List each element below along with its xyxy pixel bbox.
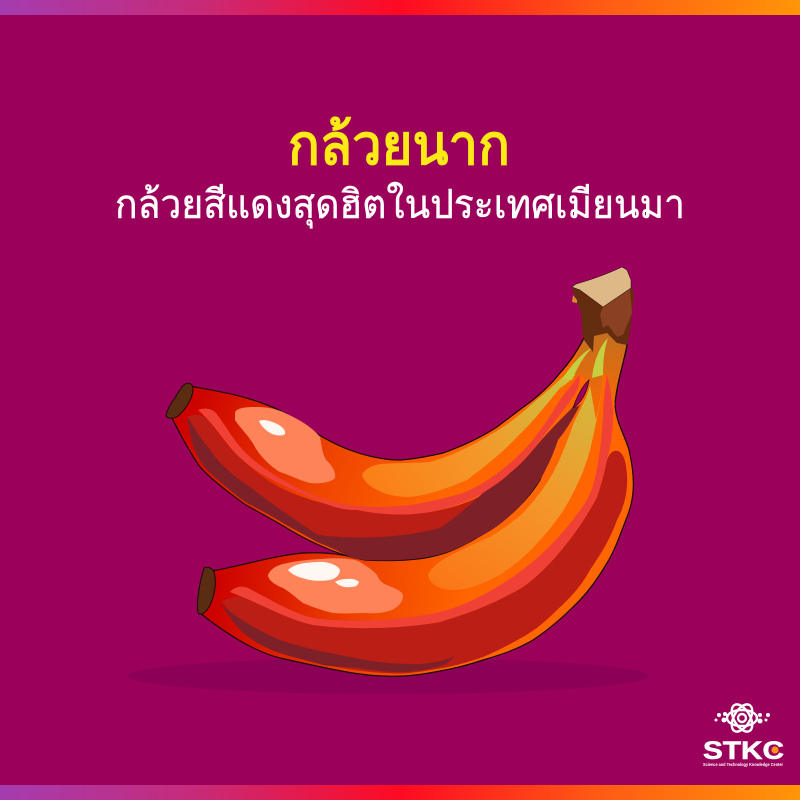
stem outline — [560, 338, 627, 403]
crown brown base — [572, 286, 634, 352]
stem light red tips — [565, 375, 613, 412]
upper banana white glint — [259, 420, 285, 436]
ground shadow — [127, 658, 649, 694]
logo tagline: Science and Technology Knowledge Center — [703, 762, 783, 767]
lower banana yellow stripe — [428, 338, 608, 590]
logo atom icon — [727, 701, 757, 735]
lower banana dark red band — [222, 451, 627, 674]
top gradient bar — [0, 0, 800, 15]
logo orange dot — [771, 746, 779, 754]
upper banana tip — [166, 383, 193, 418]
logo: STKC — [703, 701, 784, 767]
banana stem — [560, 328, 628, 420]
logo dots — [714, 712, 770, 724]
lower banana highlight — [268, 558, 403, 613]
crown small flake — [572, 295, 577, 303]
upper banana maroon shading — [188, 403, 581, 560]
crown tan cut — [572, 267, 631, 307]
title: กล้วยนาก — [288, 113, 510, 176]
stem green ridges — [563, 338, 608, 380]
lower banana tip — [197, 567, 215, 614]
upper banana yellow stripe — [362, 347, 593, 497]
lower banana — [197, 338, 633, 676]
crown light brown facet — [600, 289, 632, 337]
lower banana light red band — [230, 375, 613, 628]
bottom gradient bar — [0, 785, 800, 800]
stem body — [567, 328, 628, 420]
lower banana body — [200, 340, 633, 676]
gap between bananas — [573, 380, 589, 408]
upper banana body — [172, 338, 600, 561]
logo wordmark: STKC — [703, 737, 784, 765]
icon: red bananas — [166, 267, 634, 676]
banana crown — [572, 267, 634, 352]
upper banana light red band — [198, 375, 580, 515]
upper banana dark red band — [187, 415, 495, 558]
upper banana — [166, 338, 600, 561]
lower banana white glints — [288, 562, 359, 587]
lower banana maroon shading — [220, 603, 455, 672]
upper banana highlight — [235, 407, 335, 483]
subtitle: กล้วยสีแดงสุดฮิตในประเทศเมียนมา — [115, 181, 685, 229]
